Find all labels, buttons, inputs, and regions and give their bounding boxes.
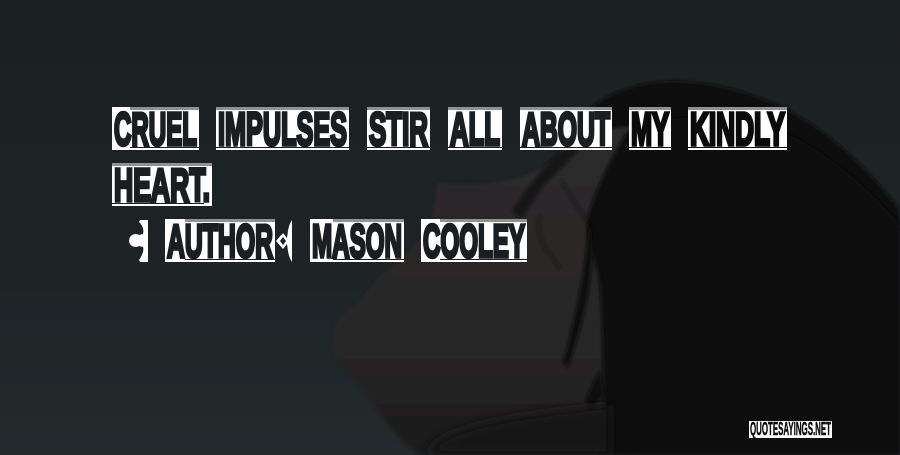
word: cruel <box>112 103 199 155</box>
word: stir: STIR <box>369 103 428 155</box>
word: my <box>629 103 671 155</box>
watermark <box>749 419 832 439</box>
upper hair shadow <box>585 81 900 455</box>
eye outline <box>539 180 587 268</box>
word: mason <box>310 215 404 267</box>
hair strap <box>512 136 590 218</box>
word: cruel: CRUEL <box>114 103 197 155</box>
word: kindly: KINDLY <box>690 103 785 155</box>
hair strand lower <box>563 220 604 410</box>
word: about <box>520 103 612 155</box>
word: cooley: COOLEY <box>423 215 525 267</box>
word: heart: HEART. <box>114 159 210 211</box>
word: kindly <box>688 103 787 155</box>
word: all: ALL <box>450 103 500 155</box>
author line <box>129 215 527 267</box>
word: about: ABOUT <box>522 103 610 155</box>
icon: bullet ornament <box>129 220 148 262</box>
word: my: MY <box>631 103 669 155</box>
icon: colon ornament <box>276 220 292 262</box>
word: mason: MASON <box>312 215 402 267</box>
word: cooley <box>421 215 527 267</box>
neck shadow <box>425 405 610 455</box>
figure silhouette <box>333 81 900 455</box>
word: all <box>448 103 502 155</box>
quote text <box>112 103 787 211</box>
word: heart <box>112 159 212 211</box>
word: stir <box>367 103 430 155</box>
hair mass <box>587 117 900 455</box>
face <box>333 125 640 455</box>
word: author: AUTHOR <box>167 215 273 267</box>
word: impulses <box>216 103 349 155</box>
word: impulses: IMPULSES <box>218 103 347 155</box>
word: author <box>165 215 275 267</box>
